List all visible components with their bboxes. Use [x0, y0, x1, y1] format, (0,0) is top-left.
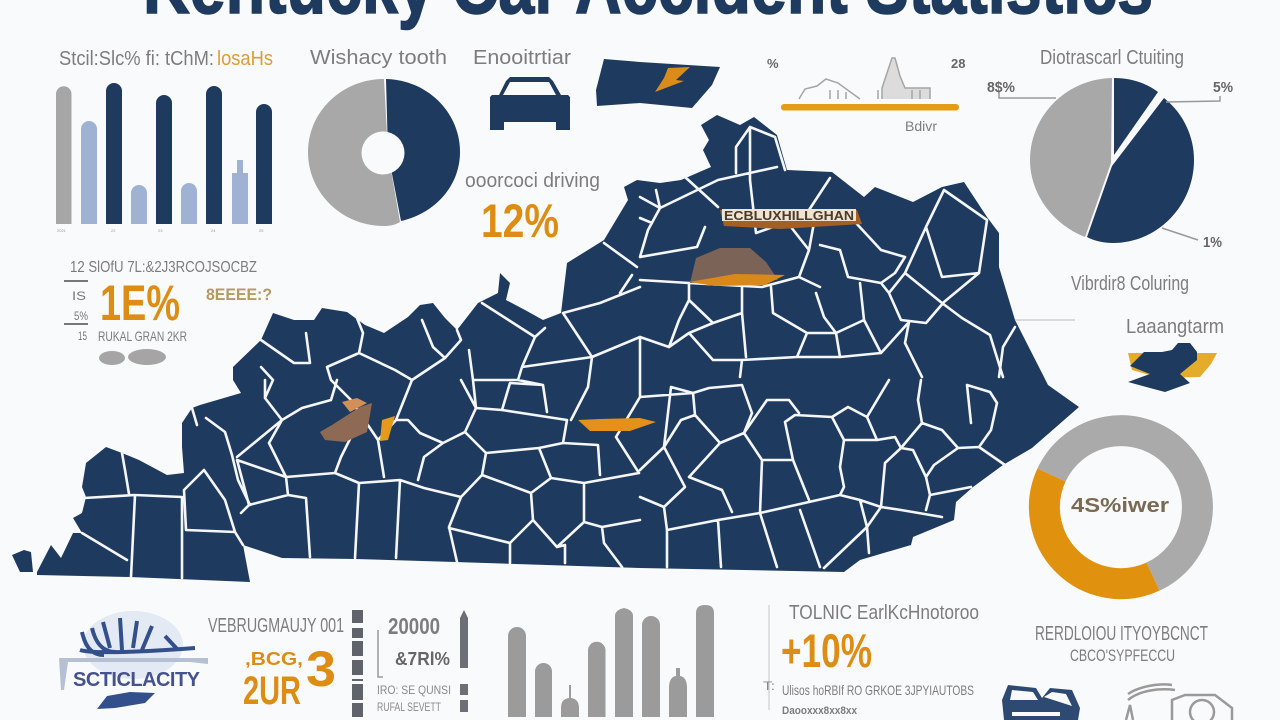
- corner figures: [767, 56, 965, 71]
- bar axis labels: 23: [158, 228, 163, 233]
- text block: right labels: [1071, 273, 1224, 338]
- stat top label: 12 SlOfU 7L:&2J3RCOJSOCBZ: [70, 259, 257, 276]
- donut slice: navy: [386, 79, 460, 221]
- label: viewing colouring: Vibrdir8 Coluring: [1071, 273, 1189, 295]
- year label: VEBRUGMAUJY 001: [208, 615, 344, 637]
- bar axis labels: [57, 228, 264, 233]
- bar axis labels: 2021: [57, 228, 67, 233]
- bar axis labels: 22: [111, 228, 116, 233]
- caption lines: IRO: SE QUNSI: [377, 683, 451, 697]
- donut heading: Wishacy tooth: [310, 47, 447, 69]
- icon: kentucky flag shape: [596, 59, 720, 108]
- sub value text: &7Rl%: [395, 649, 450, 669]
- bars: [56, 83, 272, 224]
- orange top text: ,BCG,: [245, 649, 303, 669]
- icon: capitol buildings: [799, 58, 930, 99]
- icon: car: [490, 77, 570, 130]
- map silhouette: [12, 115, 1079, 582]
- badge rays: [80, 611, 195, 679]
- panel: top-centre donut pie: [308, 47, 460, 226]
- badge text: SCTICLACITY: [73, 669, 201, 691]
- panel: bottom-right donut: [1044, 431, 1197, 584]
- caption: Bdivr: [905, 118, 937, 134]
- vertical rule: [768, 605, 770, 710]
- donut hole: [362, 132, 404, 174]
- donut slice: grey: [308, 79, 400, 226]
- map marker: orange streak: [578, 418, 656, 431]
- panel: bottom striped columns: [352, 610, 468, 717]
- heading: TOLNIC EarlKcHnotoroo: [789, 602, 979, 624]
- bar axis labels: 24: [211, 228, 216, 233]
- side glyph: T:: [763, 679, 775, 693]
- pie slice: grey: [1030, 78, 1112, 237]
- county borders: [82, 127, 1015, 578]
- pie labels: [987, 79, 1233, 251]
- map marker: dome: [689, 248, 785, 286]
- stat value: 1E%: [100, 275, 180, 331]
- stat side column: 15: [78, 329, 87, 343]
- bar chart heading: losaHs: [217, 48, 273, 70]
- icon: tow machine: [1126, 684, 1232, 720]
- panel: bottom bar chart: [508, 605, 714, 717]
- panel: bottom-left badge: [59, 611, 208, 709]
- orange baseline: [781, 104, 959, 110]
- map marker: left emblem: [320, 398, 395, 442]
- stat side column: IS: [72, 289, 86, 303]
- bracket: [378, 630, 383, 677]
- map marker: title banner: [720, 208, 862, 229]
- stat: left 1E percent: [64, 259, 272, 365]
- icon: crashed cars: [1002, 685, 1080, 720]
- panel: bottom-right vehicles: [1002, 623, 1232, 720]
- value text: 20000: [388, 613, 440, 639]
- caption line two: Daooxxx8xx8xx: [782, 705, 858, 717]
- leader line: map to right label: [1015, 319, 1075, 321]
- panel: top-right pie: [987, 47, 1233, 251]
- pie slice: small navy: [1114, 78, 1158, 155]
- map marker: title banner: ECBLUXHILLGHAN: [724, 208, 854, 223]
- stat label: ooorcoci driving: [465, 170, 600, 192]
- striped column right: [460, 610, 468, 712]
- icon: right small emblem: [1128, 343, 1217, 392]
- panel: bottom stat year: [208, 615, 344, 713]
- stat: 12 percent: [465, 170, 600, 247]
- stat side column: [64, 280, 88, 343]
- stat value: 12%: [481, 194, 559, 247]
- caption lines: RUFAL SEVETT: [377, 700, 441, 714]
- badge band: [59, 658, 208, 690]
- bar chart heading: Stcil:Slc% fi: tChM:: [59, 48, 214, 70]
- stat side note: 8EEEE:?: [206, 285, 272, 304]
- donut ring grey: [1052, 431, 1197, 577]
- panel: bottom +10 percent stat: [763, 602, 979, 717]
- corner figures: 28: [951, 56, 965, 71]
- sub heading: CBCO'SYPFECCU: [1070, 646, 1175, 665]
- orange bottom text: 2UR: [243, 669, 301, 713]
- panel: top-left bar chart: [56, 48, 273, 233]
- leader lines: [999, 91, 1220, 240]
- badge swoosh: [97, 692, 155, 709]
- bolt accent: [655, 67, 690, 92]
- stat value: +10%: [781, 624, 872, 677]
- caption line one: Ulisos hoRBIf RO GRKOE 3JPYIAUTOBS: [782, 682, 974, 698]
- caption lines: [377, 683, 451, 714]
- pie heading: Diotrascarl Ctuiting: [1040, 47, 1184, 69]
- pie slice: large navy: [1087, 98, 1194, 243]
- map of Kentucky: [12, 115, 1079, 582]
- corner figures: %: [767, 56, 779, 71]
- bar axis labels: 25: [259, 228, 264, 233]
- striped column left: [352, 610, 363, 717]
- pie labels: 5%: [1213, 79, 1233, 96]
- donut ring orange: [1044, 475, 1153, 584]
- pie labels: 8$%: [987, 79, 1015, 96]
- grey blobs: [99, 349, 166, 365]
- pie labels: 1%: [1203, 234, 1222, 251]
- stat side column: 5%: [74, 309, 88, 323]
- label: lansangtarn: Laaangtarm: [1126, 316, 1224, 338]
- stat bottom label: RUKAL GRAN 2KR: [98, 328, 187, 344]
- donut centre value: 4S%iwer: [1071, 495, 1169, 517]
- panel: capitol skyline: [767, 56, 965, 134]
- orange digit: 3: [306, 641, 336, 697]
- panel: car icon block: [473, 47, 571, 130]
- car heading: Enooitrtiar: [473, 47, 571, 69]
